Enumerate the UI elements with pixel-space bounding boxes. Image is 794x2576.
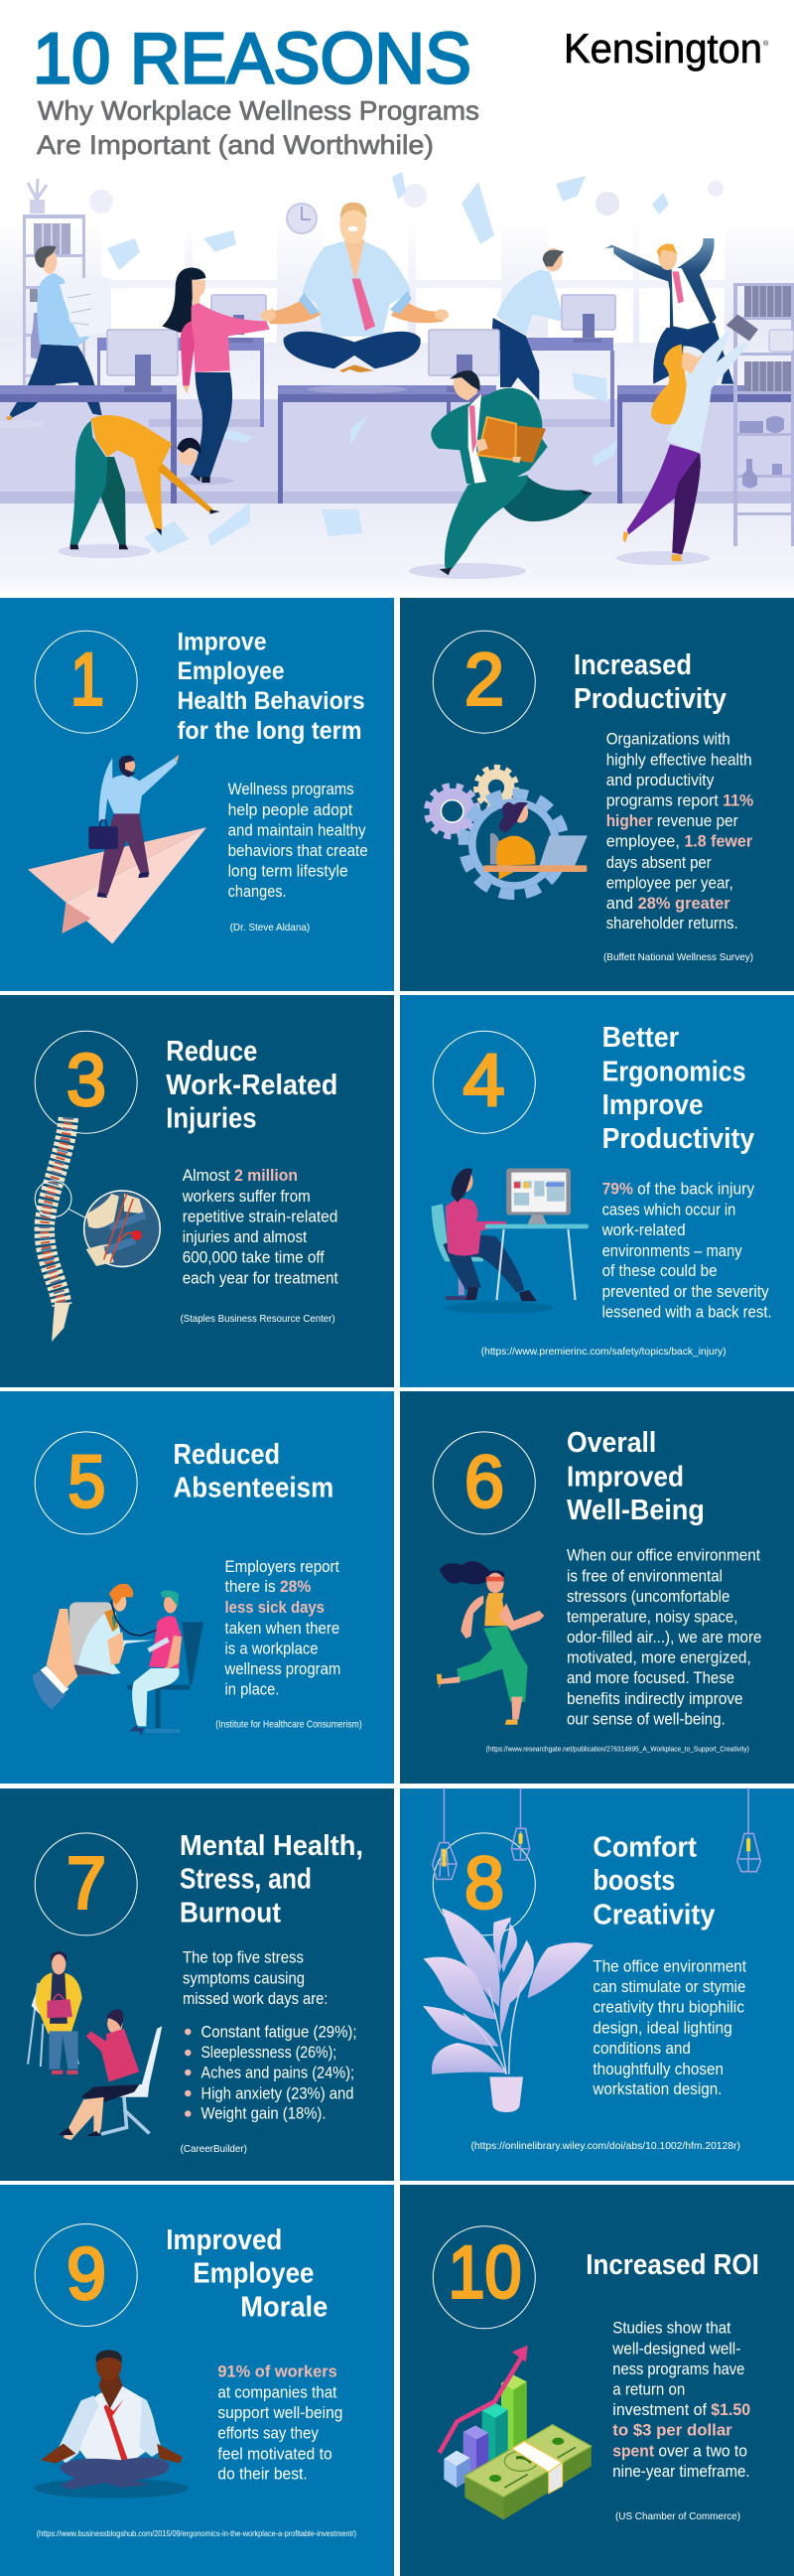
source: (Buffett National Wellness Survey) — [603, 951, 753, 963]
body text: help people adopt — [228, 801, 352, 819]
number badge 6: 6 — [464, 1440, 504, 1522]
bullet list: Aches and pains (24%); — [200, 2064, 354, 2081]
heading: boosts — [593, 1865, 675, 1897]
body text: long term lifestyle — [228, 863, 348, 881]
bullet list: Weight gain (18%). — [200, 2105, 326, 2123]
heading: Burnout — [180, 1898, 281, 1930]
body text — [601, 1181, 772, 1321]
body text: behaviors that create — [228, 842, 368, 860]
illustration: spine with callout — [35, 1118, 160, 1342]
body text: workstation design. — [592, 2080, 722, 2098]
right shelves — [733, 283, 794, 546]
number badge 3 — [35, 1031, 137, 1133]
body text: taken when there — [224, 1620, 339, 1638]
heading: Reduced — [173, 1439, 280, 1471]
number badge 9 — [35, 2224, 137, 2326]
body text: and 28% greater — [606, 895, 730, 913]
body text: Organizations with — [606, 731, 730, 749]
body text: ness programs have — [612, 2361, 744, 2378]
heading — [567, 1427, 705, 1526]
figure: running man in teal — [431, 370, 593, 575]
illustration: doctor and patient on phone — [33, 1584, 203, 1736]
source: (Institute for Healthcare Consumerism) — [215, 1718, 362, 1730]
heading: Comfort — [593, 1831, 697, 1863]
heading — [593, 1831, 715, 1931]
number badge 10 — [433, 2226, 535, 2329]
body text — [567, 1546, 761, 1729]
subtitle: Why Workplace Wellness Programs — [38, 95, 479, 125]
logo: Kensington: Kensington — [564, 25, 762, 72]
number badge 2 — [433, 631, 535, 733]
heading — [574, 649, 727, 715]
heading: Increased ROI — [586, 2249, 759, 2281]
body text: environments – many — [602, 1242, 742, 1260]
illustration: man on paper plane — [28, 755, 206, 944]
heading — [173, 1439, 333, 1504]
body text: repetitive strain-related — [183, 1209, 337, 1226]
number badge 2: 2 — [464, 639, 504, 721]
body text: lessened with a back rest. — [602, 1303, 772, 1321]
body text: is free of environmental — [567, 1567, 723, 1585]
bullet list — [185, 2024, 357, 2123]
heading: Productivity — [574, 683, 727, 715]
illustration: meditating man — [34, 2350, 189, 2499]
heading: Improved — [166, 2224, 282, 2256]
body text: Wellness programs — [228, 781, 354, 798]
bullet list: Sleeplessness (26%); — [200, 2044, 336, 2062]
panel 2 — [400, 598, 794, 991]
number badge 1: 1 — [70, 639, 104, 721]
source: (https://www.premierinc.com/safety/topics/back_injury) — [481, 1346, 727, 1358]
body text: missed work days are: — [183, 1990, 328, 2008]
body text: investment of $1.50 — [612, 2401, 750, 2419]
number badge 5: 5 — [67, 1440, 105, 1522]
front monitors — [107, 330, 499, 392]
body text: changes. — [228, 883, 287, 901]
body text: 600,000 take time off — [183, 1248, 325, 1266]
heading: Ergonomics — [602, 1056, 746, 1087]
body text: and more focused. These — [567, 1669, 734, 1687]
heading: Improve — [602, 1089, 704, 1121]
body text: injuries and almost — [183, 1228, 308, 1246]
body text: The top five stress — [183, 1948, 304, 1966]
illustration: woman at ergonomic desk — [432, 1168, 589, 1314]
number badge 9: 9 — [66, 2232, 106, 2315]
body text: our sense of well-being. — [567, 1711, 726, 1729]
heading: Injuries — [166, 1103, 257, 1135]
body text: odor-filled air...), we are more — [567, 1629, 761, 1646]
number badge 1 — [35, 631, 137, 733]
body text: shareholder returns. — [606, 915, 738, 932]
body text — [611, 2320, 750, 2481]
body text: work-related — [601, 1221, 686, 1239]
body text: there is 28% — [224, 1578, 312, 1596]
heading: Productivity — [602, 1123, 754, 1155]
panel 9 — [0, 2185, 394, 2576]
body text: symptoms causing — [183, 1969, 305, 1987]
body text: cases which occur in — [602, 1202, 735, 1219]
body text: is a workplace — [224, 1640, 318, 1657]
body text: thoughtfully chosen — [593, 2061, 724, 2078]
heading: Increased — [574, 649, 692, 681]
source: (Staples Business Resource Center) — [181, 1313, 335, 1325]
source: (https://www.businessblogshub.com/2015/09/ergonomics-in-the-workplace-a-profitable-investment/) — [37, 2529, 356, 2538]
body text: efforts say they — [217, 2425, 320, 2443]
panel 10 — [400, 2185, 794, 2576]
body text: employee per year, — [606, 874, 733, 892]
heading — [166, 2224, 328, 2323]
body text: Studies show that — [612, 2320, 731, 2338]
heading — [178, 629, 365, 745]
illustration: runner — [437, 1561, 544, 1725]
subtitle: Are Important (and Worthwhile) — [37, 130, 434, 160]
panel 1 — [0, 598, 394, 991]
number badge 6 — [433, 1432, 535, 1534]
number badge 4 — [433, 1031, 535, 1133]
body text: The office environment — [593, 1958, 746, 1976]
back desks — [97, 338, 614, 427]
panel 5 — [0, 1391, 394, 1784]
body text: conditions and — [593, 2040, 691, 2058]
panel 7 — [0, 1789, 394, 2181]
heading — [166, 1036, 337, 1135]
heading — [180, 1830, 363, 1930]
heading: Reduce — [166, 1036, 257, 1068]
body text: days absent per — [606, 854, 712, 872]
heading: Stress, and — [180, 1863, 312, 1895]
body text: wellness program — [224, 1660, 340, 1678]
heading: Mental Health, — [180, 1830, 363, 1862]
body text: workers suffer from — [182, 1188, 311, 1206]
heading: Improve — [178, 629, 267, 656]
panel 3 — [0, 995, 394, 1387]
number badge 3: 3 — [66, 1039, 106, 1121]
title: 10 REASONS — [33, 20, 471, 99]
illustration: two women talking — [28, 1951, 162, 2140]
illustration: bar chart and money stack — [440, 2346, 592, 2519]
source: (US Chamber of Commerce) — [615, 2510, 740, 2522]
body text: a return on — [612, 2381, 685, 2399]
body text: design, ideal lighting — [593, 2019, 732, 2037]
subtitle — [37, 95, 479, 160]
heading: Employee — [178, 657, 285, 685]
body text: creativity thru biophilic — [593, 1998, 744, 2016]
body text: Employers report — [224, 1558, 339, 1576]
front desks — [0, 385, 794, 503]
figure: man at back desk — [492, 248, 564, 400]
number badge 10: 10 — [449, 2230, 522, 2313]
figure: man carrying papers — [6, 246, 111, 425]
heading: Absenteeism — [173, 1473, 333, 1504]
body text: programs report 11% — [606, 792, 754, 810]
body text: each year for treatment — [183, 1269, 338, 1287]
heading: Employee — [193, 2257, 314, 2289]
number badge 7 — [35, 1833, 137, 1935]
body text: nine-year timeframe. — [612, 2463, 750, 2481]
figure: man bending in yellow — [70, 415, 220, 549]
illustration: potted plant — [423, 1908, 594, 2112]
body text: 79% of the back injury — [602, 1181, 755, 1199]
body text — [592, 1958, 746, 2098]
body text: of these could be — [602, 1262, 718, 1280]
body text: 91% of workers — [217, 2362, 337, 2380]
body text: When our office environment — [567, 1546, 760, 1564]
illustration: gears and woman with laptop — [427, 767, 588, 895]
body text: to $3 per dollar — [612, 2421, 732, 2439]
number badge 7: 7 — [66, 1841, 106, 1924]
body text: employee, 1.8 fewer — [606, 833, 753, 851]
heading: Morale — [240, 2291, 328, 2323]
heading: Work-Related — [166, 1070, 337, 1101]
body text: in place. — [224, 1681, 280, 1699]
body text: spent over a two to — [612, 2442, 747, 2460]
number badge 4: 4 — [463, 1039, 504, 1121]
heading: Overall — [567, 1427, 656, 1459]
header section — [0, 0, 794, 596]
body text: can stimulate or stymie — [593, 1978, 745, 1996]
body text: Almost 2 million — [183, 1167, 298, 1185]
bullet list: High anxiety (23%) and — [200, 2084, 353, 2102]
figure: meditating man — [261, 203, 449, 372]
body text: feel motivated to — [217, 2445, 332, 2463]
logo: Kensington: ® — [763, 40, 769, 48]
illustration: hanging lamps — [433, 1789, 760, 1879]
body text: support well-being — [217, 2404, 342, 2422]
body text: benefits indirectly improve — [567, 1690, 743, 1708]
body text: and productivity — [606, 772, 715, 789]
back monitors — [211, 295, 615, 343]
body text: do their best. — [217, 2466, 308, 2484]
heading: Improved — [567, 1461, 684, 1493]
body text — [224, 1558, 340, 1699]
number badge 8 — [433, 1833, 535, 1935]
panel 6 — [400, 1391, 794, 1784]
panel 4 — [400, 995, 794, 1387]
body text: higher revenue per — [606, 812, 738, 830]
body text: well-designed well- — [611, 2340, 740, 2358]
bullet list: Constant fatigue (29%); — [200, 2024, 357, 2042]
body text — [183, 1948, 328, 2008]
body text: less sick days — [224, 1599, 325, 1617]
body text: stressors (uncomfortable — [567, 1588, 729, 1606]
body text — [182, 1167, 338, 1287]
body text — [228, 781, 368, 901]
body text: temperature, noisy space, — [567, 1609, 737, 1627]
body text — [606, 731, 754, 932]
heading — [602, 1022, 754, 1155]
body text: highly effective health — [606, 751, 752, 769]
source: (Dr. Steve Aldana) — [230, 922, 310, 933]
heading: Better — [602, 1022, 679, 1054]
body text: and maintain healthy — [228, 821, 366, 839]
figure: woman with yellow hair — [623, 315, 758, 561]
figure: man in navy suit cheering — [605, 238, 733, 384]
source: (CareerBuilder) — [181, 2143, 247, 2155]
heading: Health Behaviors — [178, 687, 365, 715]
office illustration — [0, 172, 794, 596]
number badge 5 — [35, 1432, 137, 1534]
heading: for the long term — [178, 717, 362, 745]
panel 8 — [400, 1789, 794, 2181]
source: (https://onlinelibrary.wiley.com/doi/abs/10.1002/hfm.20128r) — [470, 2140, 740, 2152]
body text: prevented or the severity — [602, 1283, 769, 1301]
floor shadows — [0, 420, 710, 579]
body text — [217, 2362, 342, 2484]
source: (https://www.researchgate.net/publication/276314695_A_Workplace_to_Support_Creativity) — [486, 1746, 749, 1753]
body text: at companies that — [217, 2383, 337, 2401]
heading: Creativity — [593, 1899, 715, 1931]
number badge 8: 8 — [464, 1841, 504, 1924]
body text: motivated, more energized, — [567, 1648, 751, 1666]
figure: woman in pink — [162, 267, 276, 483]
heading: Well-Being — [567, 1495, 705, 1526]
